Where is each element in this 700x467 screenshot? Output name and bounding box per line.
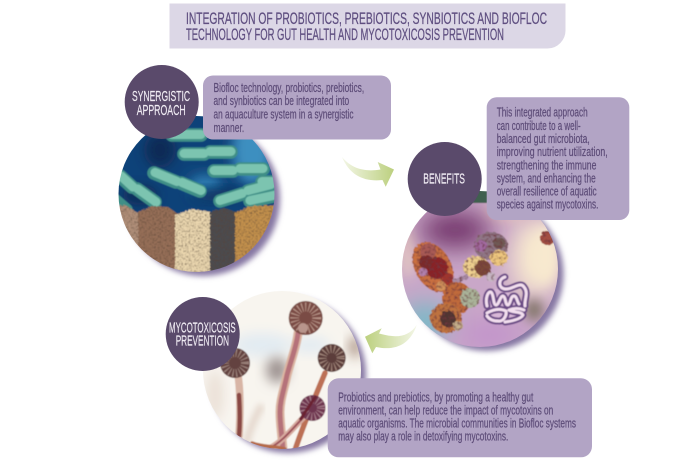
- text box: benefits: balanced gut microbiota,: [497, 132, 590, 146]
- badge: mycotoxicosis prevention: MYCOTOXICOSIS: [169, 321, 236, 337]
- text box: synergistic approach: manner.: [214, 121, 244, 135]
- badge: synergistic approach: SYNERGISTIC: [132, 89, 190, 105]
- text box: benefits: [487, 97, 629, 220]
- badge: synergistic approach: [125, 65, 199, 139]
- text box: benefits: overall resilience of aquatic: [497, 185, 597, 199]
- arrow: benefits to prevention: [365, 325, 417, 353]
- text box: mycotoxicosis prevention: may also play a role in detoxifying mycotoxins.: [338, 430, 508, 444]
- text box: synergistic approach: and synbiotics can be integrated into: [214, 94, 349, 108]
- panel: mycotoxicosis prevention image: [200, 288, 366, 453]
- badge: benefits: [408, 142, 482, 216]
- text box: synergistic approach: [203, 76, 391, 140]
- mold stalks: [238, 333, 325, 450]
- text box: benefits: species against mycotoxins.: [497, 198, 598, 212]
- text box: mycotoxicosis prevention: aquatic organisms. The microbial communities in Biofloc systems: [338, 416, 576, 430]
- badge: benefits: BENEFITS: [423, 171, 465, 187]
- text box: benefits: strengthening the immune: [497, 158, 596, 172]
- text box: benefits: This integrated approach: [497, 106, 588, 120]
- text box: synergistic approach: an aquaculture system in a synergistic: [214, 108, 354, 122]
- arrow: synergistic to benefits: [342, 157, 394, 187]
- title banner: [170, 4, 566, 49]
- badge: synergistic approach: APPROACH: [137, 103, 186, 119]
- molecule: antibody: [404, 231, 554, 333]
- text box: benefits: improving nutrient utilization,: [497, 145, 608, 159]
- bacteria rods: [112, 135, 282, 210]
- badge: mycotoxicosis prevention: PREVENTION: [176, 334, 229, 350]
- mold heads: [220, 301, 346, 421]
- panel: synergistic approach image: [112, 113, 282, 280]
- text box: benefits: system, and enhancing the: [497, 171, 596, 185]
- text box: mycotoxicosis prevention: environment, can help reduce the impact of mycotoxins on: [338, 404, 553, 418]
- text box: benefits: can contribute to a well-: [497, 119, 581, 133]
- text box: mycotoxicosis prevention: Probiotics and prebiotics, by promoting a healthy gut: [338, 391, 534, 405]
- text box: mycotoxicosis prevention: [328, 378, 592, 457]
- grain columns: [120, 204, 274, 272]
- text box: synergistic approach: Biofloc technology, probiotics, prebiotics,: [214, 81, 364, 95]
- icon: intestine: [486, 277, 526, 322]
- badge: mycotoxicosis prevention: [166, 297, 240, 371]
- panel: benefits image: [400, 189, 564, 351]
